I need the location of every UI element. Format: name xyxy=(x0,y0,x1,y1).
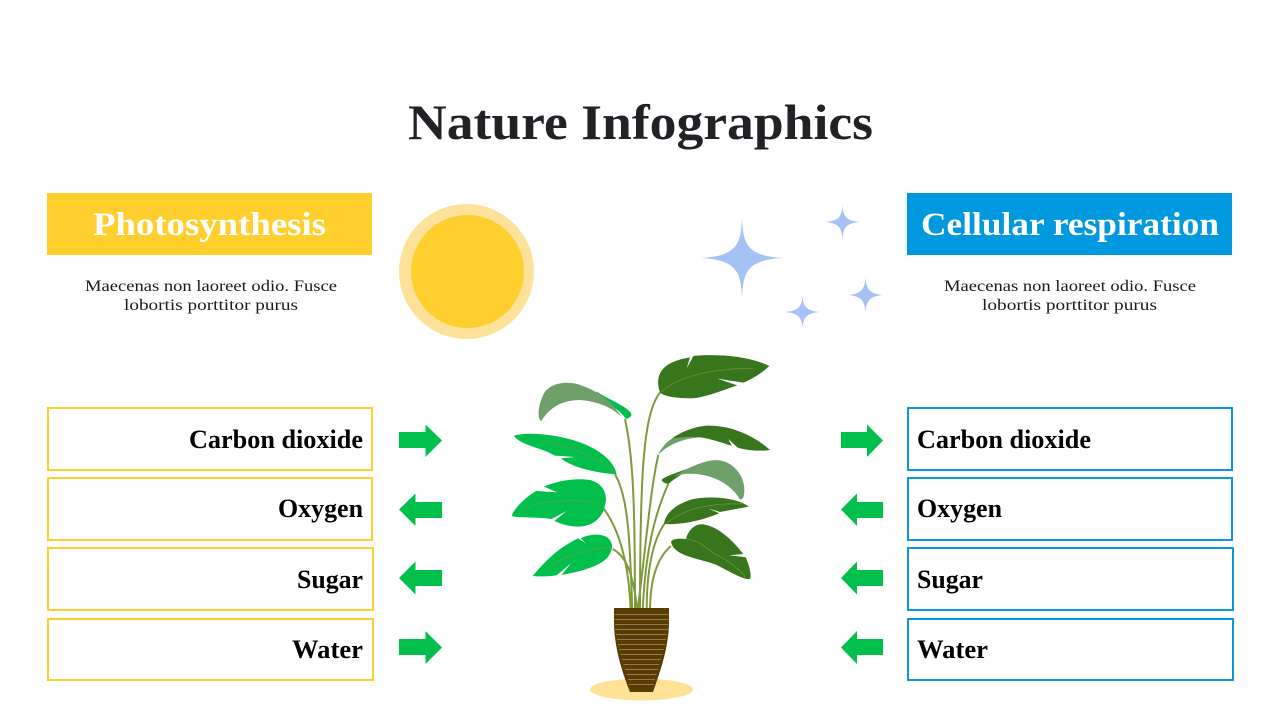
left box: water xyxy=(48,619,373,680)
left box: oxygen xyxy=(48,478,372,540)
text block: cellular respiration description: Maecenas non laoreet odio. Fusce xyxy=(944,278,1196,295)
arrow: left sugar xyxy=(399,562,442,594)
text block: photosynthesis description xyxy=(85,278,337,314)
text block: cellular respiration description xyxy=(944,278,1196,314)
left leaves xyxy=(512,383,631,576)
left box: oxygen: Oxygen xyxy=(278,494,364,523)
icon: potted plant xyxy=(512,355,770,700)
panel: left labels xyxy=(48,408,373,680)
right box: sugar: Sugar xyxy=(917,565,983,594)
left box: water: Water xyxy=(292,635,363,664)
panel: right labels xyxy=(908,408,1233,680)
text block: cellular respiration description: lobortis porttitor purus xyxy=(982,297,1157,314)
icon: sun xyxy=(399,204,534,339)
panel: cellular respiration header: Cellular respiration xyxy=(921,207,1219,243)
right leaves xyxy=(658,355,770,579)
left box: sugar xyxy=(48,548,373,610)
arrow: left carbon dioxide xyxy=(399,424,442,457)
arrow: left oxygen xyxy=(399,494,442,526)
panel: cellular respiration header xyxy=(907,193,1232,255)
left box: sugar: Sugar xyxy=(297,565,363,594)
icon: stars xyxy=(701,205,883,329)
right box: sugar xyxy=(908,548,1233,610)
arrow: right sugar xyxy=(841,562,883,594)
right box: water xyxy=(908,619,1233,680)
pot shadow xyxy=(590,678,693,700)
arrow: left water xyxy=(399,631,442,664)
left box: carbon dioxide: Carbon dioxide xyxy=(189,425,363,454)
arrow: right water xyxy=(841,631,883,664)
right box: oxygen xyxy=(908,478,1232,540)
title: Nature Infographics xyxy=(408,94,873,150)
arrow: right oxygen xyxy=(841,494,883,526)
right box: carbon dioxide: Carbon dioxide xyxy=(917,425,1091,454)
stems xyxy=(603,393,671,612)
right box: oxygen: Oxygen xyxy=(917,494,1003,523)
panel: photosynthesis header: Photosynthesis xyxy=(93,207,326,243)
text block: photosynthesis description: lobortis porttitor purus xyxy=(124,297,298,314)
panel: photosynthesis header xyxy=(47,193,372,255)
pot xyxy=(614,608,669,692)
right box: water: Water xyxy=(917,635,988,664)
left box: carbon dioxide xyxy=(48,408,372,470)
right box: carbon dioxide xyxy=(908,408,1232,470)
text block: photosynthesis description: Maecenas non laoreet odio. Fusce xyxy=(85,278,337,295)
arrow: right carbon dioxide xyxy=(841,424,883,457)
